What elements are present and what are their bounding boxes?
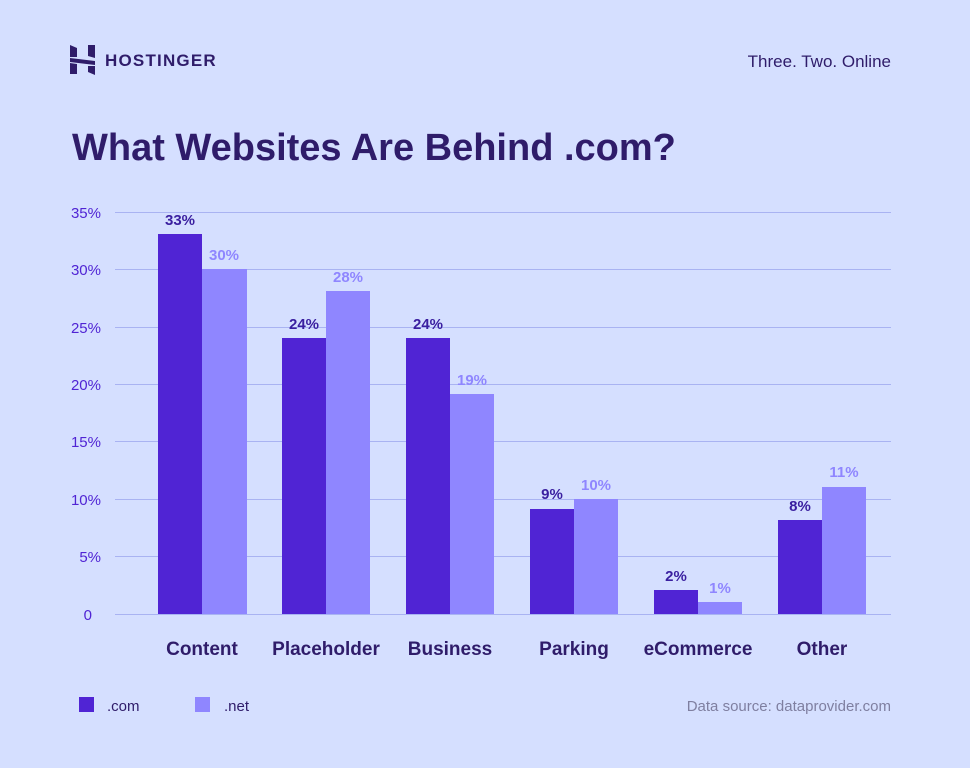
value labels: 33%	[165, 212, 195, 229]
value labels: 30%	[209, 247, 239, 264]
logo: HOSTINGER	[105, 51, 217, 70]
chart	[71, 205, 891, 660]
legend	[79, 697, 250, 715]
value labels: 10%	[581, 477, 611, 494]
category labels: Business	[408, 639, 492, 660]
value labels: 19%	[457, 372, 487, 389]
y axis labels: 0	[84, 607, 92, 624]
legend: .com	[107, 698, 140, 715]
y axis labels: 20%	[71, 377, 101, 394]
logo	[70, 45, 217, 75]
legend: .net	[224, 698, 250, 715]
category labels	[166, 639, 848, 660]
y axis labels: 15%	[71, 434, 101, 451]
y axis labels: 35%	[71, 205, 101, 222]
icon: hostinger H	[70, 45, 95, 75]
y axis labels: 30%	[71, 262, 101, 279]
category labels: Other	[797, 639, 848, 660]
category labels: Parking	[539, 639, 609, 660]
title: What Websites Are Behind .com?	[72, 127, 676, 169]
data source: Data source: dataprovider.com	[687, 698, 891, 715]
value labels: 8%	[789, 498, 811, 515]
bars	[158, 234, 866, 614]
value labels: 9%	[541, 486, 563, 503]
value labels	[165, 212, 859, 597]
value labels: 11%	[829, 464, 859, 481]
tagline: Three. Two. Online	[748, 52, 891, 71]
category labels: Content	[166, 639, 239, 660]
y axis labels: 5%	[79, 549, 101, 566]
y axis labels: 25%	[71, 320, 101, 337]
value labels: 24%	[413, 316, 443, 333]
value labels: 28%	[333, 269, 363, 286]
value labels: 1%	[709, 580, 731, 597]
value labels: 24%	[289, 316, 319, 333]
value labels: 2%	[665, 568, 687, 585]
y axis labels	[71, 205, 101, 624]
category labels: eCommerce	[644, 639, 752, 660]
category labels: Placeholder	[272, 639, 380, 660]
y axis labels: 10%	[71, 492, 101, 509]
